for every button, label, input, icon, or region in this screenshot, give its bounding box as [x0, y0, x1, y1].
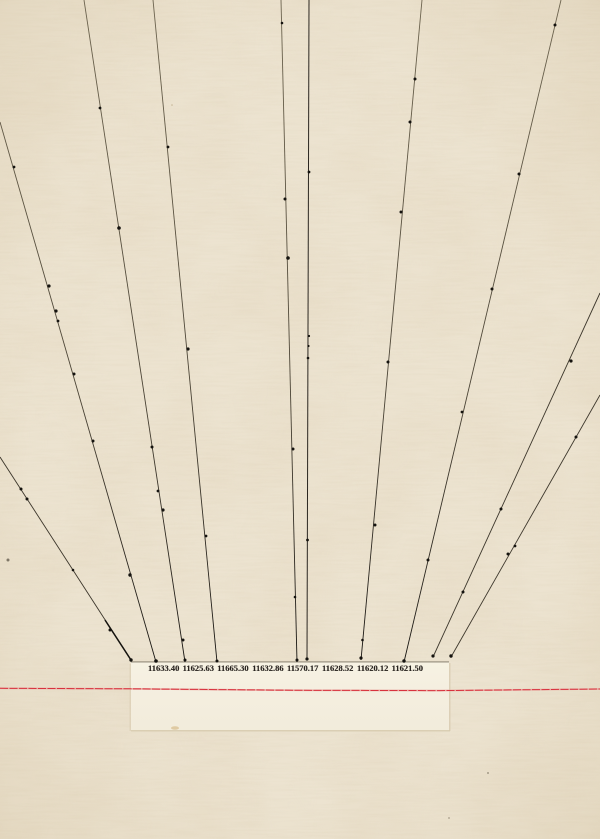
- value labels: 11570.17: [287, 663, 319, 673]
- value labels: 11620.12: [357, 663, 388, 673]
- red stitched thread: [0, 688, 600, 691]
- thread line 3: [84, 0, 186, 662]
- thread line 9: [431, 293, 600, 658]
- value labels: 11628.52: [322, 663, 353, 673]
- value labels: [148, 663, 423, 673]
- value labels: 11665.30: [217, 663, 249, 673]
- thread line 1: [0, 457, 133, 662]
- thread line 5: [281, 0, 298, 662]
- value labels: 11632.86: [252, 663, 284, 673]
- thread line 8: [402, 0, 561, 663]
- value labels: 11625.63: [183, 663, 214, 673]
- value labels: 11621.50: [392, 663, 423, 673]
- paper card with labels: [130, 661, 450, 732]
- thread line 7: [359, 0, 422, 660]
- thread line 10: [449, 395, 600, 658]
- value labels: 11633.40: [148, 663, 179, 673]
- thread line 2: [0, 122, 158, 663]
- thread line 4: [153, 0, 218, 662]
- thread line 6: [305, 0, 310, 661]
